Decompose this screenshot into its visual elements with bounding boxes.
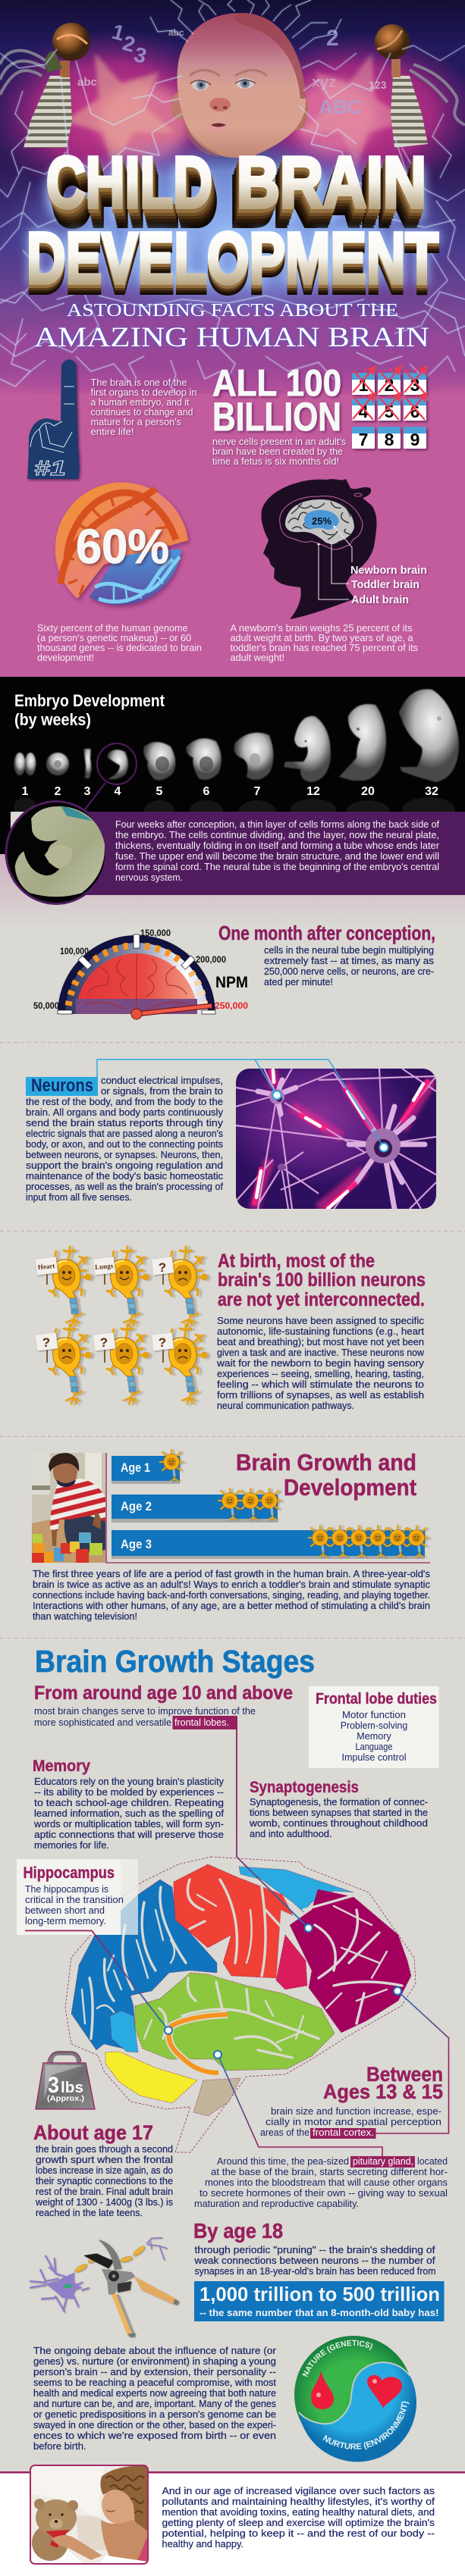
text: nature versus nurture debate: ences to which we're exposed from birth -- or even — [33, 2430, 276, 2441]
text: sixty percent: (a person's genetic makeup) -- or 60 — [37, 633, 191, 643]
icon: foam finger number one: #1 — [34, 456, 66, 480]
text: memory: aptic connections that will preserve those — [34, 1829, 224, 1840]
text: vigilance healthy lifestyles: And in our age of increased vigilance over such factors as — [162, 2485, 435, 2496]
text: between ages — [260, 2106, 441, 2139]
text: most brain changes: frontal lobes. — [174, 1717, 229, 1728]
text: about age 17: rest of the brain. Final adult brain — [36, 2186, 173, 2197]
text: neurons paragraph: conduct electrical impulses, — [101, 1075, 223, 1086]
baby head — [171, 13, 308, 158]
text: first three years: connections include having back-and-forth conversations, singing, reading, and playing together. — [33, 1590, 430, 1601]
week numbers — [22, 785, 438, 798]
cartoon neurons with job signs — [36, 1247, 208, 1404]
text: cells in the neural tube: extremely fast -- at times, as many as — [264, 956, 434, 966]
text: neurons paragraph: the rest of the body, and from the body to the — [26, 1097, 223, 1107]
panel: frontal lobe duties — [309, 1686, 438, 1768]
text: first three years: brain is twice as active as an adult's! Ways to enrich a toddler's brain and stimulate synaptic — [33, 1579, 430, 1590]
lower page background — [0, 812, 465, 2576]
gauge scale labels: 250,000 — [215, 1002, 248, 1011]
embryo images by week — [14, 689, 459, 782]
panel: frontal lobe duties: Frontal lobe duties — [316, 1691, 437, 1707]
text: periodic pruning: through periodic "pruning" -- the brain's shedding of — [194, 2245, 435, 2255]
bar chart: neurons connected by age — [112, 1450, 428, 1559]
text: neurons paragraph: brain. All organs and body parts continuously — [26, 1107, 224, 1118]
calendar tiles with crossed out months: 9 — [410, 430, 419, 449]
labels: newborn, toddler, adult brain: Toddler brain — [351, 578, 419, 591]
text: about age 17: their synaptic connections to the — [36, 2176, 173, 2186]
panel: frontal lobe duties: Language — [355, 1742, 393, 1752]
floating numbers and letters: xyz — [312, 74, 336, 91]
text: pituitary gland — [194, 2156, 448, 2209]
connector lines to neuron photo — [97, 1060, 388, 1152]
title: child brain development — [27, 142, 438, 299]
panel: hippocampus: between short and — [25, 1905, 105, 1916]
calendar tiles with crossed out months: 8 — [385, 430, 394, 449]
heading: embryo development by weeks — [14, 691, 165, 729]
floating numbers and letters: ABC — [319, 95, 362, 118]
text: some neurons — [216, 1316, 425, 1411]
heading: at birth most neurons — [218, 1250, 426, 1310]
text: some neurons: Some neurons have been assigned to specific — [217, 1316, 424, 1326]
text: nature versus nurture debate: person's brain -- and by extension, their personality -- — [33, 2367, 276, 2377]
text: vigilance healthy lifestyles: potential, helping to keep it -- and the rest of our body -- — [162, 2527, 435, 2539]
photo: toddler playing with blocks — [32, 1453, 430, 1563]
text: some neurons: feeling -- which will stimulate the neurons to — [217, 1379, 424, 1390]
heading: synaptogenesis: Synaptogenesis — [250, 1779, 359, 1796]
text: nerve cells: time a fetus is six months old! — [212, 456, 339, 467]
text: nature versus nurture debate: seems to be reaching a peaceful compromise, with most — [33, 2377, 277, 2388]
text: cells in the neural tube: ated per minute! — [264, 977, 333, 988]
floating numbers and letters: abc — [168, 27, 184, 38]
heading: about age 17: About age 17 — [33, 2121, 153, 2144]
leader line to frontal lobe — [237, 1729, 309, 1928]
panel: frontal lobe duties: Memory — [357, 1731, 391, 1742]
photo: neurons firing — [236, 1069, 436, 1209]
text: nature versus nurture debate: and nurture can be, and are, important. Many of the genes — [33, 2399, 276, 2409]
floating numbers and letters: 3 — [131, 42, 149, 68]
text: synaptogenesis: Synaptogenesis, the formation of connec- — [250, 1797, 428, 1808]
text: some neurons: experiences -- seeing, smelling, hearing, tasting, — [217, 1369, 424, 1379]
calendar tiles with crossed out months: 5 — [385, 402, 394, 421]
bar chart: neurons connected by age: Age 3 — [121, 1537, 152, 1551]
title: child brain development: BRAIN — [237, 142, 426, 223]
text: four weeks after conception: fuse. The upper end will become the brain structure, and the lower end will — [115, 851, 439, 862]
text: first three years: Interactions with other humans, of any age, are a better method of stimulating a child's brain — [33, 1601, 430, 1611]
icon: three pound weight: lbs — [61, 2080, 83, 2096]
heading: brain growth and development: Brain Growth and — [236, 1449, 416, 1476]
text: about age 17: reached in the late teens. — [36, 2208, 143, 2218]
text: brain is one of the first organs — [91, 377, 197, 437]
text: neurons paragraph: electric signals that are passed along a neuron's — [26, 1128, 223, 1139]
text: memory: Educators rely on the young brain's plasticity — [34, 1776, 225, 1787]
text: vigilance healthy lifestyles: pollutants and maintaining healthy lifestyles, it's worthy of — [162, 2496, 435, 2507]
text: nature versus nurture debate: before birth. — [33, 2441, 86, 2452]
text: memory: memories for life. — [34, 1840, 109, 1851]
heading: embryo development by weeks: Embryo Development — [14, 691, 165, 710]
text: about age 17: the brain goes through a second — [36, 2144, 173, 2155]
dashed brain outline — [65, 1857, 416, 2152]
text: brain is one of the first organs: continues to change and — [91, 407, 193, 418]
callout connector — [85, 743, 137, 809]
panel: frontal lobe duties: Problem-solving — [341, 1720, 407, 1731]
gauge scale labels: NPM — [215, 974, 248, 991]
cartoon neurons with job signs: Heart — [37, 1262, 55, 1271]
text: periodic pruning: synapses in an 18-year-old's brain has been reduced from — [194, 2266, 435, 2277]
text: four weeks after conception: the embryo. The cells continue dividing, and the layer, now the neural plate, — [115, 830, 439, 840]
text: periodic pruning: weak connections between neurons -- the number of — [193, 2255, 435, 2266]
heading: at birth most neurons: are not yet interconnected. — [218, 1289, 425, 1310]
heading: between ages 13 and 15: Ages 13 & 15 — [323, 2080, 443, 2103]
text: most brain changes — [34, 1705, 256, 1729]
week numbers: 20 — [361, 785, 375, 798]
text: brain is one of the first organs: entire life! — [91, 427, 134, 437]
text: about age 17 — [35, 2144, 173, 2218]
leader line to pituitary — [218, 2055, 382, 2156]
heading: by age 18: By age 18 — [193, 2219, 283, 2243]
bar chart: neurons connected by age: Age 1 — [121, 1460, 150, 1475]
text: pituitary gland: located — [417, 2156, 448, 2167]
limbic arc — [169, 2014, 228, 2074]
text: synaptogenesis: tions between synapses that started in the — [250, 1808, 428, 1818]
embryo reflections — [14, 797, 455, 825]
text: pituitary gland: maturation and reproductive capability. — [194, 2199, 359, 2209]
text: neurons paragraph: between neurons, or synapses. Neurons, then, — [26, 1150, 223, 1160]
silhouette with brain sizes: 25% — [312, 515, 331, 527]
panel: hippocampus: long-term memory. — [25, 1916, 106, 1927]
photo: sleeping girl with teddy bear — [30, 2465, 148, 2564]
bar chart: neurons connected by age: Age 2 — [121, 1499, 152, 1513]
text: newborn's brain weighs — [231, 623, 418, 663]
chart: sixty percent genome pie — [55, 482, 188, 605]
text: pituitary gland: Around this time, the pea-sized — [217, 2156, 349, 2167]
text: neurons paragraph: or signals, from the brain to — [101, 1086, 223, 1097]
floating numbers and letters: 2 — [326, 26, 339, 51]
text: pituitary gland: at the base of the brain, starts secreting different hor- — [211, 2167, 448, 2177]
text: between ages: brain size and function increase, espe- — [271, 2106, 441, 2117]
text: pituitary gland: mones into the bloodstream that will cause other organs — [205, 2177, 448, 2188]
icon: three pound weight: 3 — [48, 2073, 59, 2098]
cartoon neurons with job signs: ? — [100, 1335, 108, 1350]
heading: between ages 13 and 15 — [323, 2063, 443, 2103]
chart: neurons per minute gauge — [33, 929, 247, 1020]
text: nerve cells: brain have been created by the — [212, 446, 343, 457]
heading: memory: Memory — [33, 1758, 90, 1775]
text: nature versus nurture debate: The ongoing debate about the influence of nature (or — [33, 2346, 276, 2356]
callout: 1,000 trillion to 500 trillion — [194, 2281, 445, 2321]
text: four weeks after conception: nervous system. — [115, 872, 183, 883]
heading: at birth most neurons: brain's 100 billion neurons — [218, 1269, 426, 1291]
calendar tiles with crossed out months: 1 — [359, 375, 369, 395]
calendar tiles with crossed out months: 2 — [385, 375, 394, 395]
text: cells in the neural tube: cells in the neural tube begin multiplying — [264, 945, 434, 956]
text: first three years: than watching television! — [33, 1611, 137, 1622]
text: nature versus nurture debate: or genetic predispositions in a person's genome can be — [33, 2409, 276, 2420]
icon: three pound weight — [36, 2052, 95, 2109]
icon: three pound weight: (Approx.) — [47, 2094, 84, 2103]
heading: at birth most neurons: At birth, most of the — [218, 1250, 375, 1272]
text: most brain changes: most brain changes serve to improve function of the — [34, 1705, 256, 1717]
text: synaptogenesis: and into adulthood. — [250, 1829, 332, 1839]
gauge scale labels — [33, 929, 248, 1011]
title: child brain development: CHILD — [46, 142, 212, 223]
text: synaptogenesis — [249, 1797, 428, 1839]
text: nerve cells — [212, 437, 346, 467]
text: memory: learned information, such as the spelling of — [34, 1808, 225, 1819]
week numbers: 7 — [254, 785, 261, 798]
icon: nature and nurture yin yang: NURTURE (ENVIRONMENT) — [323, 2401, 410, 2449]
tesla coil left — [0, 23, 90, 148]
panel: hippocampus: The hippocampus is — [25, 1884, 108, 1895]
text: sixty percent — [37, 623, 202, 663]
week numbers: 12 — [306, 785, 320, 798]
lightning bolts — [0, 0, 465, 409]
heading: brain growth and development: Development — [284, 1474, 416, 1501]
text: memory: to teach school-age children. Repeating — [34, 1798, 224, 1808]
cartoon neurons with job signs: ? — [159, 1335, 166, 1350]
panel: hippocampus — [17, 1859, 138, 1935]
calendar tiles with crossed out months: 4 — [359, 402, 369, 421]
icon: foam finger number one — [27, 359, 79, 480]
text: four weeks after conception: Four weeks after conception, a thin layer of cells forms along the back side of — [115, 819, 440, 830]
text: sixty percent: development! — [37, 653, 94, 663]
week numbers: 5 — [156, 785, 163, 798]
callout: 1,000 trillion to 500 trillion: -- the same number that an 8-month-old baby has! — [200, 2307, 438, 2318]
header background — [0, 0, 465, 402]
text: some neurons: neural communication pathways. — [217, 1401, 354, 1411]
icon: nature and nurture yin yang: NATURE (GENETICS) — [302, 2340, 372, 2377]
text: vigilance healthy lifestyles: getting plenty of sleep and exercise will optimize the brain's — [162, 2517, 435, 2528]
text: vigilance healthy lifestyles — [162, 2485, 435, 2549]
subtitle: ASTOUNDING FACTS ABOUT THE — [67, 301, 398, 321]
subtitle — [34, 301, 429, 353]
text: neurons paragraph — [26, 1075, 224, 1203]
text: memory: -- its ability to be molded by experiences -- — [34, 1787, 224, 1798]
text: neurons paragraph: body, or axon, and out to the connecting points — [26, 1139, 223, 1150]
text: nature versus nurture debate — [33, 2346, 277, 2452]
week numbers: 2 — [55, 785, 61, 798]
callout: 1,000 trillion to 500 trillion: 1,000 trillion to 500 trillion — [200, 2283, 440, 2305]
text: nature versus nurture debate: genes) vs. nurture (or environment) in shaping a young — [33, 2356, 276, 2367]
calendar tiles with crossed out months — [352, 365, 428, 449]
calendar tiles with crossed out months: 3 — [410, 375, 419, 395]
text: memory — [33, 1776, 225, 1851]
text: neurons paragraph: send the brain status reports through tiny — [26, 1118, 224, 1128]
text: most brain changes: more sophisticated and versatile — [34, 1717, 171, 1728]
parietal and occipital lobes — [71, 1864, 411, 2116]
pink section background — [0, 394, 465, 677]
heading: between ages 13 and 15: Between — [366, 2063, 443, 2086]
heading: all 100 billion: BILLION — [212, 395, 341, 440]
text: four weeks after conception — [115, 819, 440, 883]
text: newborn's brain weighs: adult weight! — [231, 653, 284, 663]
week numbers: 6 — [203, 785, 210, 798]
gauge scale labels: 200,000 — [196, 956, 226, 965]
text: nerve cells: nerve cells present in an adult's — [212, 437, 346, 447]
panel: embryo development — [0, 677, 465, 903]
text: vigilance healthy lifestyles: healthy and happy. — [162, 2538, 243, 2549]
calendar tiles with crossed out months: 6 — [410, 402, 419, 421]
text: cells in the neural tube: 250,000 nerve cells, or neurons, are cre- — [264, 966, 434, 977]
text: newborn's brain weighs: adult weight at birth. By two years of age, a — [231, 633, 413, 643]
floating numbers and letters: 123 — [369, 79, 387, 91]
text: neurons paragraph: processes, as well as the brain's processing of — [26, 1182, 224, 1192]
text: some neurons: wait for the newborn to begin having sensory — [216, 1358, 425, 1369]
text: about age 17: lobes increase in size again, as do — [36, 2165, 173, 2176]
labels: newborn, toddler, adult brain: Adult brain — [351, 593, 409, 606]
floating numbers and letters: 1 — [109, 20, 127, 45]
subtitle: AMAZING HUMAN BRAIN — [34, 322, 429, 353]
text: between ages: cially in motor and spatial perception — [265, 2117, 441, 2127]
text: sixty percent: thousand genes -- is dedicated to brain — [37, 643, 202, 653]
heading: all 100 billion — [212, 363, 341, 440]
text: first three years — [33, 1569, 430, 1622]
text: first three years: The first three years of life are a period of fast growth in the human brain. A three-year-old's — [33, 1569, 430, 1579]
panel: frontal lobe duties: Impulse control — [341, 1752, 407, 1763]
heading: from around age 10: From around age 10 and above — [34, 1682, 293, 1704]
silhouette with brain sizes — [261, 479, 377, 619]
brain diagram — [65, 1729, 449, 2156]
panel: frontal lobe duties: Motor function — [342, 1710, 406, 1720]
icon: nature and nurture yin yang — [294, 2336, 416, 2462]
text: pituitary gland: to secrete hormones of their own -- giving way to sexual — [200, 2188, 448, 2199]
labels: newborn, toddler, adult brain: Newborn brain — [350, 564, 427, 577]
cartoon neurons with job signs: ? — [42, 1335, 50, 1350]
text: four weeks after conception: thickens, eventually folding in on itself and forming a tube whose ends later — [115, 840, 439, 851]
text: some neurons: given a task and are inactive. These neurons now — [217, 1347, 425, 1358]
week numbers: 3 — [84, 785, 91, 798]
text: neurons paragraph: maintenance of the body's basic homeostatic — [26, 1171, 223, 1182]
floating numbers and letters: 2 — [120, 31, 138, 57]
gauge scale labels: 50,000 — [33, 1002, 59, 1011]
text: between ages: areas of the — [260, 2127, 309, 2138]
chart: sixty percent genome pie: 60% — [76, 519, 169, 574]
text: brain is one of the first organs: first organs to develop in — [91, 387, 197, 398]
floating numbers and letters: abc — [77, 76, 97, 89]
text: brain is one of the first organs: mature for a person's — [91, 417, 181, 427]
cartoon neurons with job signs: ? — [159, 1260, 166, 1275]
text: brain is one of the first organs: a human embryo, and it — [91, 397, 190, 408]
text: periodic pruning — [193, 2245, 435, 2277]
text: neurons paragraph: input from all five senses. — [26, 1192, 132, 1203]
text: four weeks after conception: form the spinal cord. The neural tube is the beginning of the embryo's central — [115, 862, 439, 872]
text: cells in the neural tube — [264, 945, 434, 988]
purple callout banner — [83, 812, 465, 895]
heading: all 100 billion: ALL 100 — [212, 363, 341, 404]
text: nature versus nurture debate: swayed in one direction or the other, based on the experi- — [33, 2420, 276, 2430]
text: some neurons: form trillions of synapses, as well as establish — [217, 1390, 424, 1401]
week numbers: 4 — [115, 785, 121, 798]
text: newborn's brain weighs: A newborn's brain weighs 25 percent of its — [231, 623, 413, 634]
text: pituitary gland: pituitary gland, — [353, 2156, 413, 2167]
text: about age 17: weight of 1300 - 1400g (3 lbs.) is — [35, 2197, 173, 2208]
illustration: neuron and pruning shears — [30, 2238, 180, 2337]
heading: brain growth and development — [236, 1449, 416, 1501]
tesla coil right — [375, 24, 465, 148]
leader line to frontal cortex — [376, 1991, 449, 2133]
heading: brain growth stages: Brain Growth Stages — [35, 1644, 315, 1679]
text: nature versus nurture debate: health and medical experts now agreeing that both nature — [33, 2388, 276, 2399]
text: about age 17: growth spurt when the frontal — [36, 2155, 173, 2165]
panel: hippocampus: Hippocampus — [23, 1864, 115, 1882]
text: between ages: frontal cortex. — [313, 2127, 374, 2138]
week numbers: 32 — [425, 785, 438, 798]
panel: hippocampus: critical in the transition — [25, 1895, 124, 1905]
text: vigilance healthy lifestyles: mention that avoiding toxins, eating healthy natural diets, and — [162, 2506, 435, 2518]
week numbers: 1 — [22, 785, 29, 798]
floating numbers and letters — [77, 20, 387, 118]
hippocampus leader line and markers — [25, 1924, 401, 2058]
text: brain is one of the first organs: The brain is one of the — [91, 377, 187, 388]
text: some neurons: beat and breathing); but most have not yet been — [217, 1337, 424, 1347]
heading: embryo development by weeks: (by weeks) — [14, 710, 91, 729]
embryo close-up — [6, 802, 106, 903]
cartoon neurons with job signs: Lungs — [95, 1262, 114, 1271]
text: some neurons: autonomic, life-sustaining functions (e.g., heart — [217, 1326, 425, 1337]
sulci — [90, 1880, 402, 2058]
label: neurons: Neurons — [31, 1075, 93, 1096]
text: newborn's brain weighs: toddler's brain has reached 75 percent of its — [231, 643, 418, 653]
text: synaptogenesis: womb, continues throughout childhood — [249, 1818, 428, 1829]
text: memory: words or multiplication tables, will form syn- — [33, 1819, 224, 1829]
text: neurons paragraph: support the brain's ongoing regulation and — [26, 1160, 223, 1171]
text: sixty percent: Sixty percent of the human genome — [37, 623, 188, 634]
gauge scale labels: 100,000 — [60, 947, 89, 956]
calendar tiles with crossed out months: 7 — [359, 430, 368, 449]
gauge scale labels: 150,000 — [140, 929, 171, 938]
labels: newborn, toddler, adult brain — [350, 564, 427, 606]
